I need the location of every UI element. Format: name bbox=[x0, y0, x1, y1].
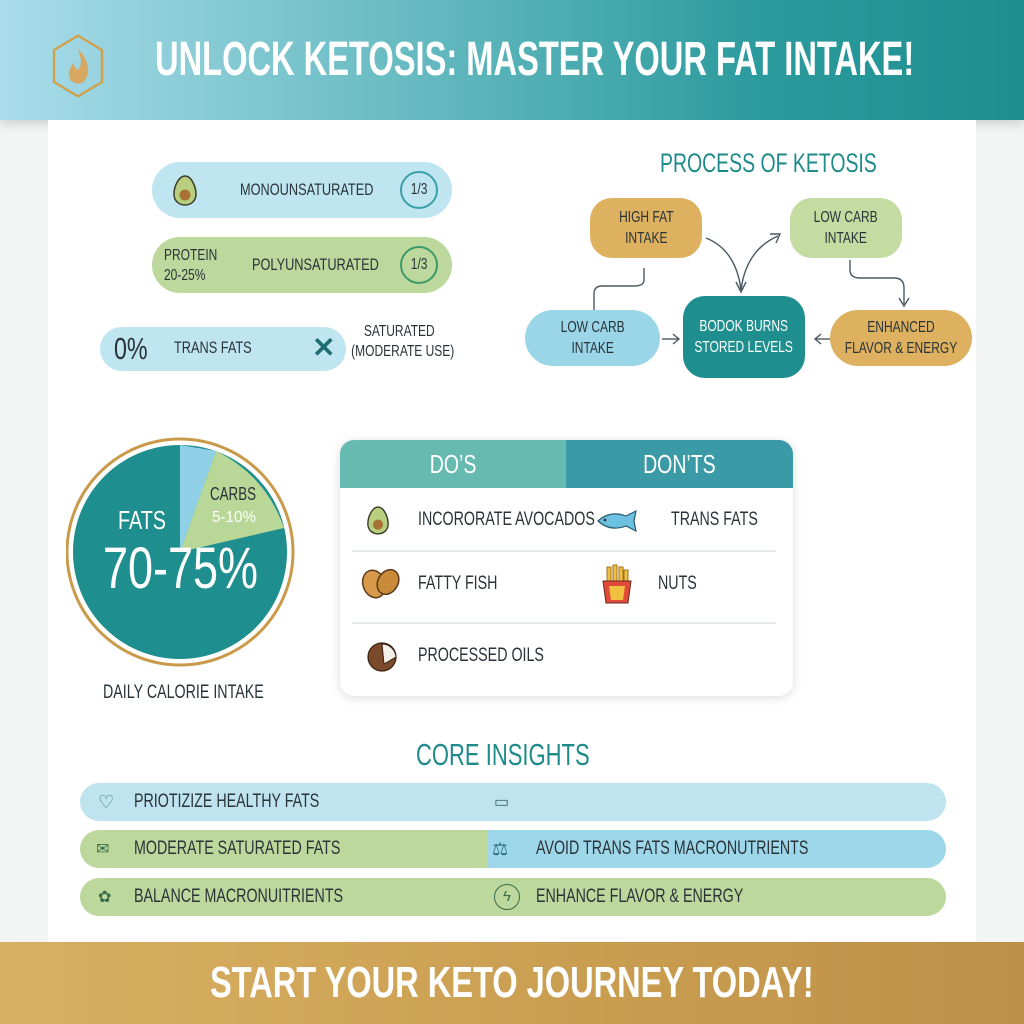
panel: do's and don'ts bbox=[340, 440, 793, 696]
icon: flame hexagon bbox=[52, 34, 104, 98]
pill: polyunsaturated: 1/3 bbox=[411, 256, 427, 273]
pill: polyunsaturated bbox=[152, 237, 452, 293]
panel: fat types bbox=[100, 162, 454, 371]
bar 3: BALANCE MACRONUITRIENTS bbox=[134, 886, 343, 907]
pill: monounsaturated bbox=[152, 162, 452, 218]
pill: trans fats bbox=[100, 327, 346, 371]
row 1: TRANS FATS bbox=[671, 509, 758, 530]
heading: core insights: CORE INSIGHTS bbox=[416, 737, 590, 772]
pill: monounsaturated: MONOUNSATURATED bbox=[240, 180, 373, 199]
bar 1: PRIOTIZIZE HEALTHY FATS bbox=[134, 791, 319, 812]
pill: polyunsaturated: 20-25% bbox=[164, 267, 205, 284]
pill: polyunsaturated: PROTEIN bbox=[164, 247, 217, 264]
node: low carb intake top bbox=[790, 198, 902, 258]
bar 1: ▭ bbox=[494, 794, 509, 811]
node: enhanced flavor bbox=[830, 310, 972, 366]
header: don'ts: DON’TS bbox=[643, 448, 716, 478]
footer text: START YOUR KETO JOURNEY TODAY! bbox=[210, 958, 814, 1007]
flowchart: ketosis process bbox=[525, 198, 972, 378]
heading: process of ketosis: PROCESS OF KETOSIS bbox=[660, 148, 877, 178]
bar 2: ✉ bbox=[96, 841, 109, 858]
bar 2: ⚖ bbox=[492, 838, 508, 858]
row 2: NUTS bbox=[658, 573, 697, 594]
pie chart: daily calorie intake: CARBS bbox=[210, 484, 256, 504]
text: saturated: SATURATED bbox=[364, 323, 434, 340]
node: low carb intake left: LOW CARB bbox=[560, 319, 625, 336]
pill: trans fats: TRANS FATS bbox=[174, 338, 252, 357]
row 3: PROCESSED OILS bbox=[418, 645, 544, 666]
row 1: INCORORATE AVOCADOS bbox=[418, 509, 595, 530]
panel: core insights bars bbox=[80, 783, 946, 916]
row 2: FATTY FISH bbox=[418, 573, 497, 594]
bar 2 bbox=[80, 830, 946, 868]
pie chart: daily calorie intake: 5-10% bbox=[212, 509, 256, 526]
header: do's: DO’S bbox=[430, 448, 476, 478]
bar 3: ϟ bbox=[503, 888, 511, 905]
pie chart: daily calorie intake: FATS bbox=[118, 505, 166, 535]
pill: polyunsaturated: POLYUNSATURATED bbox=[252, 255, 379, 274]
node: high fat intake: INTAKE bbox=[625, 230, 667, 247]
node: enhanced flavor: FLAVOR & ENERGY bbox=[845, 340, 957, 357]
node: low carb intake left: INTAKE bbox=[571, 340, 614, 357]
pill: monounsaturated: 1/3 bbox=[411, 181, 427, 198]
bar 1 bbox=[80, 783, 946, 821]
node: low carb intake left bbox=[525, 310, 660, 366]
node: body burns: STORED LEVELS bbox=[695, 339, 793, 356]
row 1 bbox=[367, 506, 758, 534]
bar 3: ✿ bbox=[98, 889, 111, 906]
header: do's bbox=[340, 440, 566, 488]
title: UNLOCK KETOSIS: MASTER YOUR FAT INTAKE! bbox=[155, 33, 914, 86]
text: saturated bbox=[351, 323, 454, 360]
node: body burns bbox=[683, 296, 805, 378]
node: low carb intake top: LOW CARB bbox=[814, 209, 878, 226]
bar 2: MODERATE SATURATED FATS bbox=[134, 838, 340, 859]
node: enhanced flavor: ENHANCED bbox=[867, 319, 935, 336]
main panel bbox=[48, 120, 976, 942]
pie chart: daily calorie intake bbox=[66, 438, 294, 703]
bar 3: ENHANCE FLAVOR & ENERGY bbox=[536, 886, 743, 907]
bar 2: AVOID TRANS FATS MACRONUTRIENTS bbox=[536, 838, 808, 859]
bar 1: ♡ bbox=[98, 792, 114, 812]
pill: trans fats: ✕ bbox=[312, 332, 335, 363]
node: low carb intake top: INTAKE bbox=[825, 230, 867, 247]
row 2 bbox=[362, 564, 697, 604]
node: high fat intake: HIGH FAT bbox=[619, 209, 673, 226]
pill: trans fats: 0% bbox=[114, 331, 148, 366]
node: body burns: BODOK BURNS bbox=[700, 318, 788, 335]
caption: DAILY CALORIE INTAKE bbox=[103, 682, 264, 703]
text: saturated: (MODERATE USE) bbox=[351, 343, 454, 360]
header banner bbox=[0, 0, 1024, 120]
bar 3 bbox=[80, 878, 946, 916]
header: don'ts bbox=[566, 440, 793, 488]
footer banner bbox=[0, 942, 1024, 1024]
row 3 bbox=[367, 642, 544, 672]
node: high fat intake bbox=[590, 198, 702, 258]
